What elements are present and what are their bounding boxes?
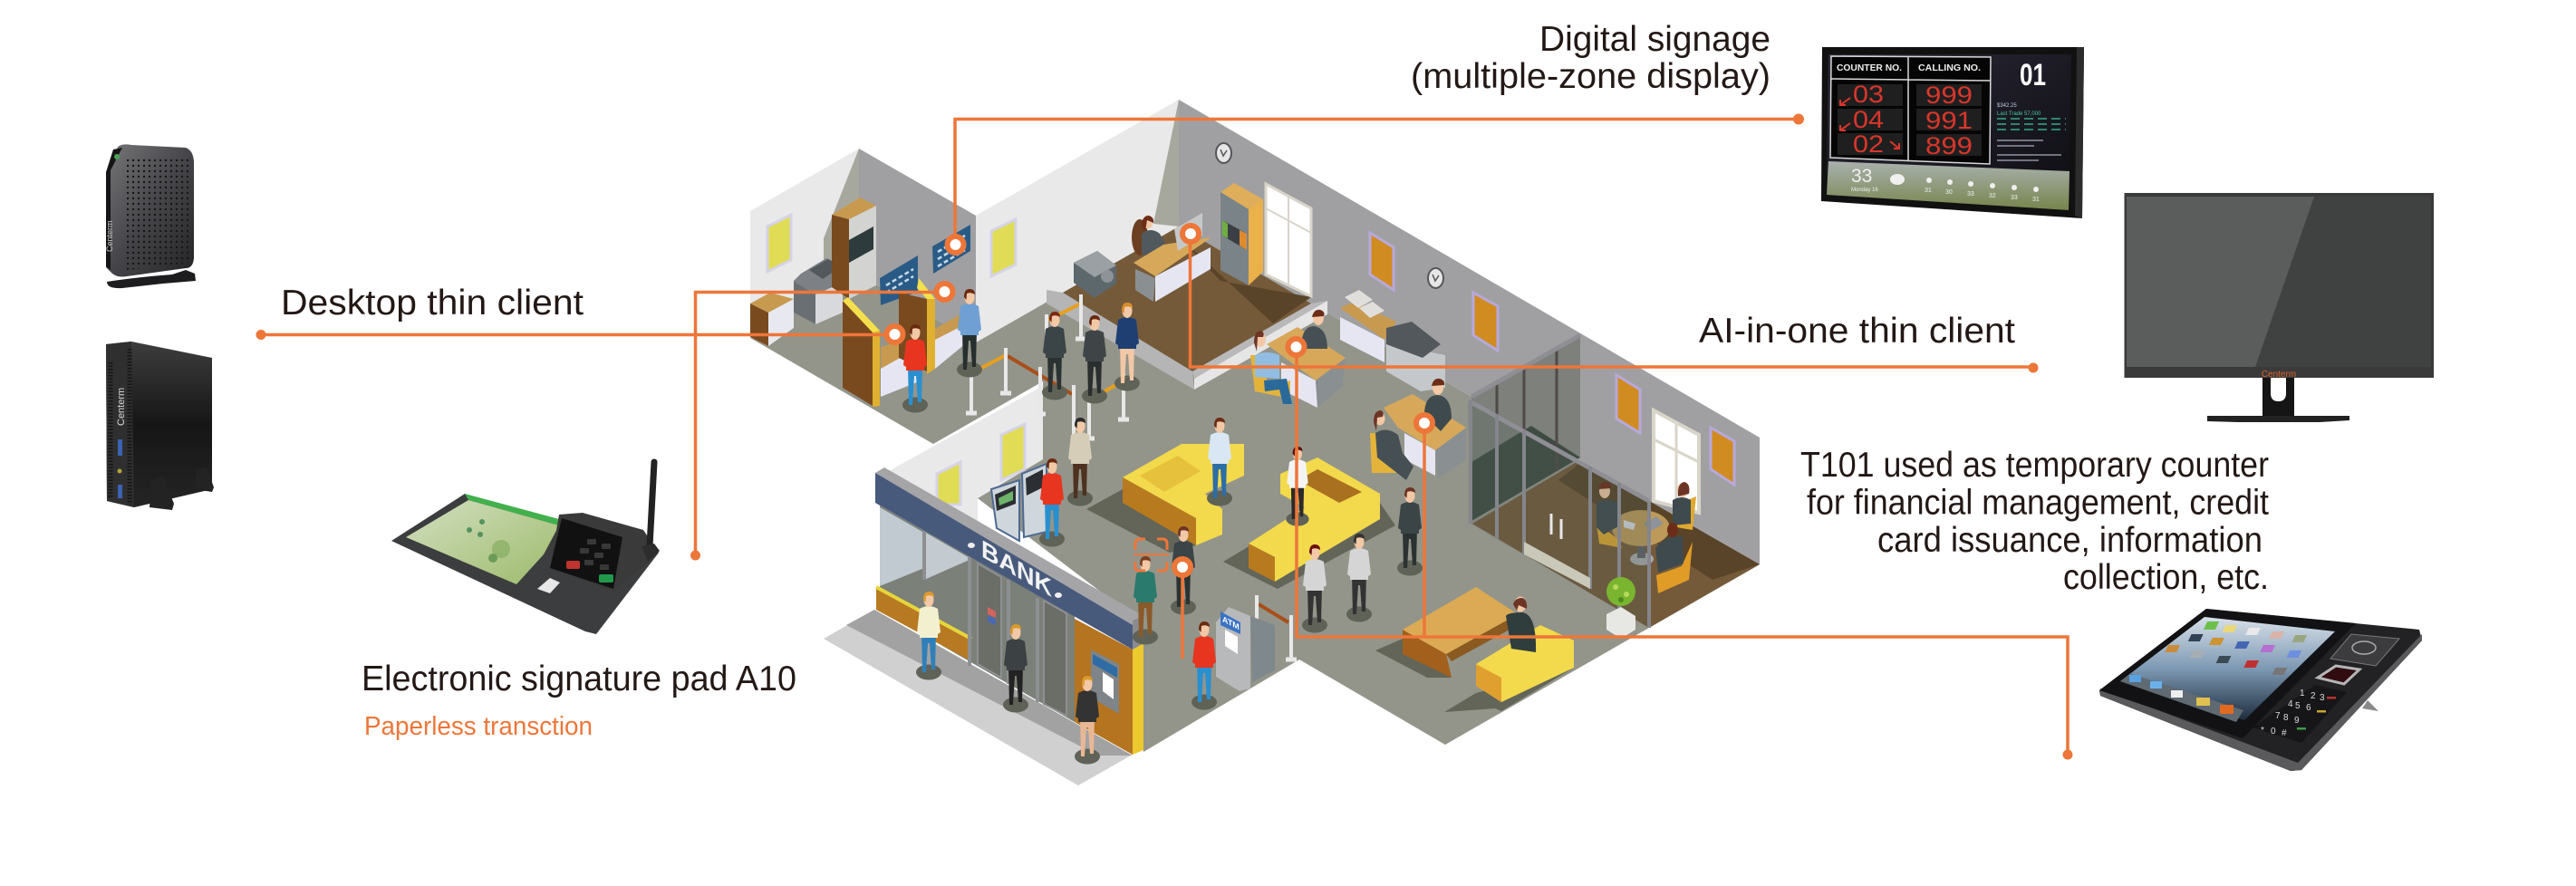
person: blue dress bbox=[1114, 303, 1140, 391]
keypad: 7 bbox=[2275, 711, 2281, 721]
weather strip: 30 bbox=[1945, 189, 1953, 196]
floor bbox=[750, 226, 1760, 752]
round table bbox=[1612, 510, 1670, 565]
arrow: T101 leader bbox=[1297, 347, 2068, 755]
keypad: 0 bbox=[2271, 727, 2276, 737]
panel: teller room walls bbox=[750, 149, 976, 342]
device: desktop thin client one bbox=[105, 144, 196, 288]
panel: main hall walls bbox=[976, 100, 1760, 564]
label: desktop thin client: Desktop thin client bbox=[281, 284, 584, 323]
device: all-in-one monitor bbox=[2124, 193, 2434, 422]
counter numbers: 991 bbox=[1925, 107, 1973, 134]
text block: T101 description: collection, etc. bbox=[2063, 558, 2269, 597]
device: desktop thin client two bbox=[106, 342, 214, 510]
digit cells bbox=[1838, 84, 1982, 156]
sign text: BANK bbox=[981, 535, 1052, 603]
arrow: digital signage leader bbox=[955, 120, 1799, 245]
brand: Centerm bbox=[2262, 370, 2296, 380]
person: guard bbox=[1067, 418, 1093, 506]
table headers: COUNTER NO. bbox=[1837, 63, 1902, 73]
info text: Last Trade 57,000 bbox=[1997, 111, 2041, 117]
panel: teller counters bbox=[750, 197, 976, 407]
counter numbers: 999 bbox=[1925, 82, 1973, 109]
person: suit at storefront bbox=[1003, 624, 1028, 712]
person: seated on sofa A bbox=[1207, 418, 1232, 506]
keypad: 5 bbox=[2295, 701, 2301, 711]
keypad: 6 bbox=[2306, 703, 2311, 713]
keypad bbox=[2253, 685, 2347, 743]
keypad: 3 bbox=[2320, 693, 2325, 703]
person: staff woman standing bbox=[1397, 487, 1423, 576]
panel: manager platform bbox=[1047, 183, 1327, 390]
app icons bbox=[2129, 621, 2307, 714]
weather strip: Monday 16 bbox=[1851, 188, 1878, 193]
label: paperless transaction: Paperless transction bbox=[364, 712, 593, 741]
person: handshake left bbox=[1302, 544, 1327, 632]
location pins bbox=[886, 226, 1433, 575]
text block: T101 description bbox=[1800, 446, 2269, 597]
queue display boards bbox=[880, 225, 970, 305]
panel: customer desk 3 bbox=[1370, 379, 1466, 480]
keypad: 2 bbox=[2311, 691, 2316, 701]
keypad: # bbox=[2282, 728, 2287, 738]
weather strip bbox=[1851, 166, 2040, 203]
NFC reader bbox=[2330, 634, 2399, 666]
icon: potted plant bbox=[1606, 577, 1635, 639]
keypad: * bbox=[2261, 726, 2264, 736]
info text: $342.25 bbox=[1997, 103, 2017, 109]
person: handshake right bbox=[1346, 534, 1372, 621]
arrow: short pin stem bbox=[1181, 567, 1184, 659]
counter numbers: 02 bbox=[1853, 130, 1884, 158]
person: kiosk user bbox=[1039, 458, 1065, 547]
wall ATM bbox=[1091, 650, 1119, 714]
panel: ATM bbox=[1216, 607, 1275, 691]
people bbox=[902, 289, 1423, 765]
panel: meeting room bbox=[1468, 335, 1760, 628]
brand on front: Centerm bbox=[116, 388, 127, 426]
device: T101 tablet bbox=[2099, 609, 2422, 771]
label: all-in-one thin client: AI-in-one thin client bbox=[1699, 312, 2015, 351]
panel: sofa A bbox=[1086, 444, 1244, 553]
weather strip: 33 bbox=[2011, 195, 2018, 201]
connector lines and pins bbox=[261, 120, 2068, 755]
person: suit in queue bbox=[1082, 315, 1107, 404]
text block: T101 description: T101 used as temporary counter bbox=[1800, 446, 2269, 485]
service number: 01 bbox=[2020, 58, 2046, 92]
weather strip: 32 bbox=[1989, 193, 1996, 199]
keypad: 4 bbox=[2288, 699, 2293, 709]
person: red shirt customer bbox=[902, 324, 928, 413]
icon: clock bbox=[1428, 268, 1443, 288]
panel: right side cabinet and printer bbox=[1340, 290, 1445, 391]
weather strip: 31 bbox=[2032, 197, 2040, 203]
keypad: 1 bbox=[2300, 689, 2305, 698]
person: woman at storefront bbox=[916, 592, 941, 679]
text block: T101 description: for financial management, credit bbox=[1807, 484, 2269, 522]
weather strip: 33 bbox=[1851, 166, 1872, 187]
label: signature pad: Electronic signature pad A10 bbox=[362, 660, 796, 698]
ATM label: ATM bbox=[1222, 614, 1240, 632]
direction arrows bbox=[1840, 98, 1899, 149]
person: woman at wall ATM bbox=[1075, 676, 1100, 765]
panel: self service kiosks bbox=[991, 464, 1047, 541]
bank fascia sign bbox=[875, 467, 1143, 650]
info text bbox=[1997, 103, 2066, 160]
weather strip: 33 bbox=[1967, 191, 1974, 197]
meeting people bbox=[1597, 482, 1696, 593]
weather strip: 31 bbox=[1925, 188, 1932, 194]
panel: manager desk bbox=[1132, 213, 1211, 302]
label: digital signage subtitle: (multiple-zone display) bbox=[1411, 57, 1770, 96]
fingerprint sensor bbox=[2318, 666, 2359, 684]
person: staff woman bbox=[1171, 526, 1196, 614]
queue ropes and posts bbox=[966, 294, 1297, 660]
icon: face scan frame bbox=[1134, 539, 1169, 571]
device: digital signage screen: CALLING NO. bbox=[1918, 63, 1981, 73]
text block: T101 description: card issuance, information bbox=[1877, 521, 2262, 560]
counter numbers: 04 bbox=[1853, 106, 1884, 133]
person: ATM user bbox=[1192, 621, 1217, 710]
arrow: all-in-one leader bbox=[1191, 234, 2033, 367]
keypad: 9 bbox=[2294, 716, 2300, 726]
arrow: desktop thin client leader bbox=[261, 333, 895, 336]
tall cabinet bbox=[832, 197, 876, 299]
panel: lobby wall bbox=[885, 386, 1043, 534]
person: dark suit in queue bbox=[1042, 312, 1067, 400]
person: blue shirt customer bbox=[957, 289, 982, 377]
person: teal customer bbox=[1133, 556, 1158, 645]
panel: customer desk 2 bbox=[1250, 310, 1346, 408]
label: digital signage: Digital signage bbox=[1539, 20, 1770, 59]
panel: low table and sofa bbox=[1375, 587, 1574, 712]
printer bbox=[794, 258, 843, 324]
counter numbers: 899 bbox=[1925, 132, 1973, 159]
illustration: isometric bank branch bbox=[750, 100, 1760, 785]
device: digital signage screen bbox=[1821, 47, 2084, 218]
arrow: signature pad leader bbox=[696, 292, 945, 555]
panel: bank storefront bbox=[824, 467, 1143, 785]
counter numbers bbox=[1853, 81, 1973, 159]
brand on front: Centerm bbox=[105, 220, 114, 252]
keypad: 8 bbox=[2283, 713, 2289, 723]
leader end dots bbox=[256, 114, 2073, 759]
counter numbers: 03 bbox=[1853, 81, 1884, 108]
device: electronic signature pad bbox=[391, 462, 660, 634]
panel: sofa B bbox=[1223, 457, 1395, 589]
person: seated on sofa B bbox=[1286, 447, 1309, 526]
icon: clock bbox=[1216, 143, 1231, 163]
